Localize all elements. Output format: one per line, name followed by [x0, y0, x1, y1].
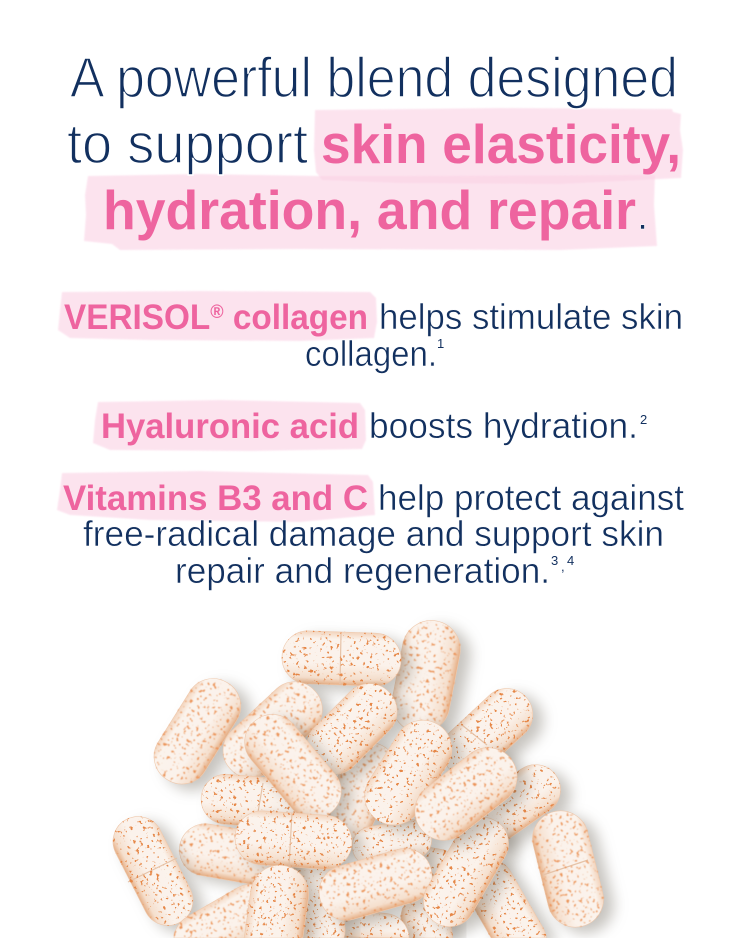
tablet — [144, 668, 251, 794]
highlight: Vitamins B3 and C — [57, 471, 375, 522]
highlight: Hyaluronic acid — [93, 400, 366, 451]
text block: VERISOL collagen: 1 — [437, 336, 444, 351]
text block: Vitamins B3 and C: 3 — [551, 553, 558, 568]
title: skin elasticity, — [321, 113, 681, 175]
tablet — [313, 842, 438, 927]
text block: VERISOL collagen: VERISOL — [64, 298, 218, 337]
tablet — [404, 844, 460, 888]
tablet — [104, 808, 202, 934]
text block: Vitamins B3 and C: help protect against — [378, 477, 684, 518]
tablet — [431, 678, 543, 787]
text block: Vitamins B3 and C: Vitamins B3 and C — [63, 479, 368, 518]
tablet — [460, 755, 570, 853]
tablet — [281, 630, 402, 687]
text block: Hyaluronic acid: boosts hydration. — [369, 405, 638, 446]
image: pile of speckled tablets — [104, 616, 609, 938]
title: to support — [67, 112, 308, 176]
tablet — [414, 808, 518, 936]
tablet — [244, 861, 312, 938]
tablet — [295, 672, 408, 786]
text block: Hyaluronic acid: 2 — [640, 412, 647, 427]
title: A powerful blend designed — [70, 46, 678, 110]
tablet — [289, 853, 346, 938]
tablet — [212, 671, 334, 789]
tablet — [399, 891, 453, 938]
text block: Vitamins B3 and C — [63, 477, 684, 591]
text block: VERISOL collagen: helps stimulate skin — [379, 296, 683, 337]
text block: Hyaluronic acid — [101, 405, 647, 446]
tablet — [349, 816, 435, 870]
text block: Vitamins B3 and C: repair and regeneration. — [175, 550, 550, 591]
tablet — [387, 616, 465, 738]
text block: Vitamins B3 and C: 4 — [567, 553, 574, 568]
text block: VERISOL collagen — [64, 296, 683, 374]
tablet — [329, 909, 411, 938]
tablet — [199, 772, 318, 832]
text block: Hyaluronic acid: Hyaluronic acid — [101, 407, 359, 446]
text block: Vitamins B3 and C: , — [561, 559, 565, 574]
tablet — [455, 850, 548, 938]
tablet — [527, 805, 609, 933]
highlight: skin elasticity — [314, 108, 683, 184]
text block: VERISOL collagen: collagen. — [305, 333, 437, 374]
tablet — [403, 736, 529, 852]
tablet — [354, 709, 463, 836]
highlight: VERISOL collagen — [58, 291, 377, 341]
tablet — [168, 875, 286, 938]
text block: VERISOL collagen: ® — [210, 302, 224, 323]
text block: Vitamins B3 and C: free-radical damage and support skin — [83, 513, 664, 554]
tablet — [234, 703, 352, 830]
highlight: hydration and repair — [84, 174, 657, 250]
tablet — [175, 820, 295, 890]
title: hydration, and repair — [103, 179, 636, 241]
text block: VERISOL collagen: collagen — [224, 298, 368, 337]
title: . — [637, 194, 648, 238]
title — [67, 46, 681, 241]
tablet — [311, 734, 405, 856]
tablet — [233, 809, 354, 871]
